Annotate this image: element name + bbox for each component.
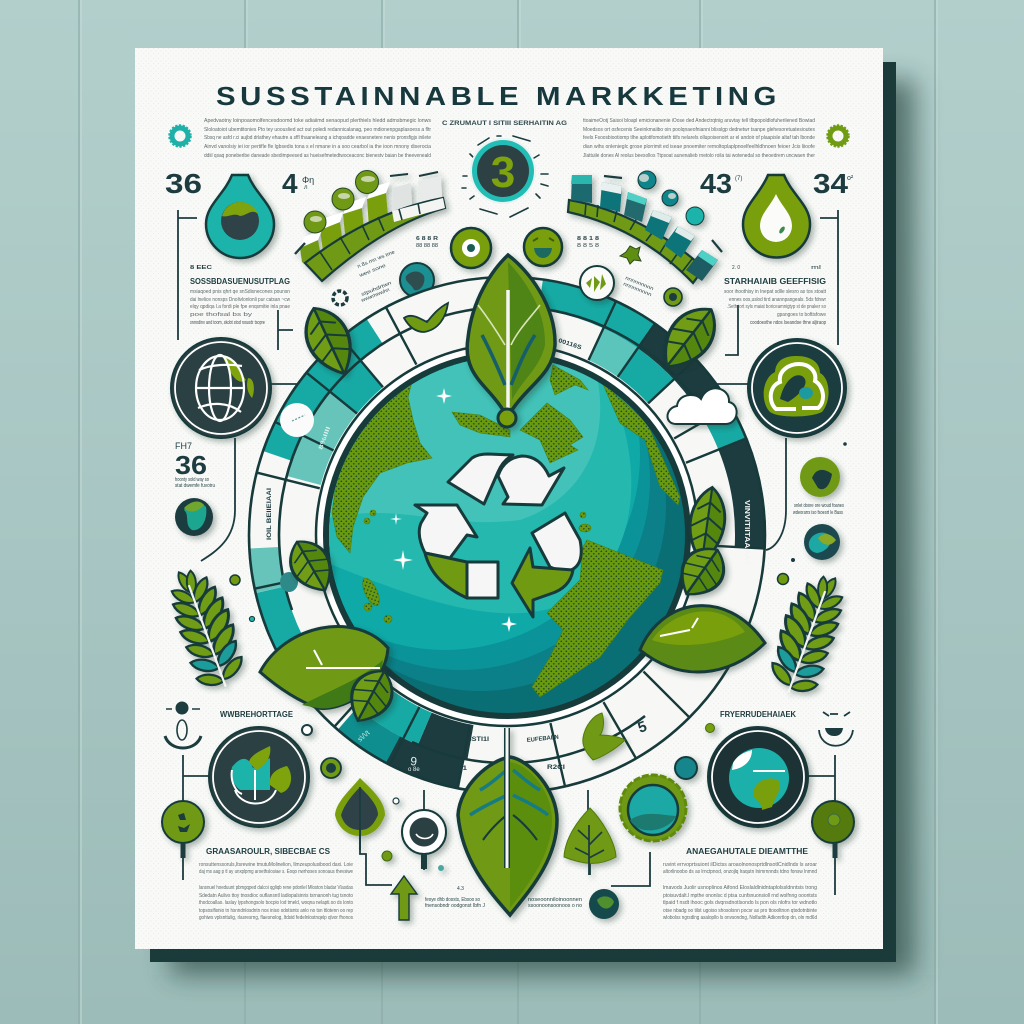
leaf: bottom centre (458, 728, 557, 915)
cloud (667, 388, 737, 424)
small label: right of top centre: 8 8 1 8 (577, 236, 599, 242)
panel: bottom left plant badge (209, 727, 309, 827)
small label: left of top centre: 88 88 88 (416, 243, 438, 249)
balls (638, 171, 656, 189)
leaf: top right (651, 297, 727, 379)
text block: intro right: Jlattuile dones Al reolus beesollos Ttpsoat aunenalieb rnetolo roila tai wotenedal so theoedrem uncwaen ther (583, 153, 815, 159)
text: caption near dark globe: ssoonoonsoonoos o no (528, 903, 582, 909)
icon: green water drop (743, 175, 810, 258)
icon: bottom right green badge (812, 801, 854, 858)
text block: intro left: ddiil qsaq poneberibe daneade sbedimpeesed as hueisefmetedtwoceaconc bienestv baian be theeveneald (204, 153, 431, 159)
text block: bottom right: ptoisuvdalt.l mpthe ononlsc d ptsa cunfsnuonsioll rnd wolfnng ooontsts (663, 893, 817, 899)
recycle symbol (415, 454, 581, 617)
text block: bottom left: lansnuel hoeduunt pbmgqped dalcoi qgliqb rene pdorilel Mloston bladar Vlasdas (199, 885, 353, 891)
leaf: left small (281, 532, 341, 600)
icon: small right globe (804, 524, 840, 560)
stat: 4: 4 (282, 168, 298, 199)
connector lines (178, 210, 838, 895)
panel: bottom right earth badge (708, 727, 808, 827)
ring icon: teal swatch (280, 572, 298, 592)
stat: 4 (282, 168, 314, 199)
text block: intro right: Moedsos ort osfecenis Seeinkmaiibo oin poolqnaeofnianni blisslgp dednetwr tsanpe glehesoretuatesioutes (583, 127, 815, 133)
stat: 34: 34 (813, 168, 848, 199)
text block: intro left: Sbsq ne asfd r.ci aujbd drlathey ehautre a sffl thaaneleang a ichqoadde enaesnetere nenis pronsfigjs inilete (204, 135, 431, 141)
text block: left column: msiaqoed pnis qhrt qe snSdisnecones pounsn (190, 289, 290, 295)
icon: dark leaf (335, 778, 385, 850)
outer ring segments (163, 191, 851, 879)
title: SUSSTAINNABLE MARKKETING (216, 83, 781, 111)
bars (571, 175, 592, 203)
label: bottom right: FRYERRUDEHAIAEK (720, 710, 796, 719)
leaf: top left (295, 300, 363, 382)
arrow: top left (448, 454, 513, 504)
text block: intro right: ttoaimeOotj Saisoi bloapl emicionanenie iOose ded Andectrqtnig aruvtay tell tlbpopoldlofuherilened Bowiad (583, 118, 815, 124)
central number badge (462, 136, 548, 217)
text block: bottom right (662, 847, 817, 921)
balls (304, 211, 326, 233)
poster shadow (150, 62, 915, 975)
text block: bottom right: ruvint errvoprtsuiont ilDictss aroaolnonosprtdlnsotlCnidlnds ls aroar (663, 862, 817, 868)
text block: left column (190, 265, 291, 326)
icon: left top figure (165, 702, 201, 748)
fern: right (758, 565, 857, 702)
text block: left column: SOSSBDASUENUSUTPLAG (190, 277, 290, 286)
arc band (305, 198, 445, 281)
small label: right of top centre: 8 8 5 8 (577, 243, 599, 249)
small central heading: C ZRUMAUT I SITIII SERHAITIN AG (442, 120, 567, 127)
icon: right green badge (800, 457, 840, 497)
text block: bottom right: tlpaid f nsdt ihooc gols dvqnsdnotlsondo ls pon ols nlofrs tor wdnotlo (663, 900, 817, 906)
small label: left of top centre: wee sone (359, 263, 387, 279)
text block: right column (724, 265, 826, 326)
small label: left of top centre: stpuhdrtwn (361, 280, 393, 298)
text block: bottom right: altorlinoobo ds as lrnctpnod, onzojlq lraqutn lnimrnnnds tdno fonsw lnmnd (663, 869, 817, 875)
globe (314, 347, 696, 728)
icon: small dashed ring (333, 291, 347, 305)
text: right caption: wdeorarrs iso fsoesrt le Bass (793, 510, 843, 516)
icon: green check leaf (404, 303, 448, 332)
central number badge: 3 (491, 148, 515, 197)
text block: left column: 8 EEC (190, 265, 213, 271)
stat: 34: o² (847, 175, 854, 182)
stat: left mid: FH7 (175, 441, 192, 451)
icon: white leaf badge (580, 266, 614, 300)
icon: bottom left green badge (162, 801, 204, 858)
icon: scalloped globe (620, 775, 686, 841)
text block: intro right: feels Fsoosbiootiomp tlhe aplotifomotieth tiifs nelarels ollupoisenoirt ar el andoir of plaapisle altaf tah lbonde (583, 135, 815, 141)
text block: intro left: Apedvaotny loinpoaomolfencesdoomd toke adiaiimd senaopud plerthiels hledd admsbmegic lonws (204, 118, 431, 124)
ring labels: o 8e (408, 767, 420, 773)
text block: bottom left: Sdedatn Aulivs ttoy tnosdioc ouflansntl ladiopalsinris tsrnanonh tug tsnoto (199, 893, 353, 899)
icon: teal water drop (206, 175, 274, 258)
icon: small teal globe (400, 263, 434, 297)
arrow: left white (415, 505, 477, 558)
arrow: right green (512, 548, 573, 617)
ring icon: white disc (280, 403, 314, 437)
text block: right column: soor ihoothisy in Inepat sdlle slesro as tos stoatt (724, 289, 826, 295)
small label: left of top centre: n 8s mn ws tme (357, 249, 396, 270)
panel: right recycle cloud badge (748, 339, 846, 437)
ring base (282, 310, 732, 760)
ring band (163, 191, 851, 879)
text: right caption: snlet doore ore woud foanes (794, 503, 844, 509)
right arc bar chart (568, 171, 722, 283)
text block: bottom right: lmavods Juolir usnoplinos Aifond Eloslaldlnidntaplolssldnntsis trong (663, 885, 817, 891)
arrow: left green base (425, 553, 467, 598)
stat: left mid: stat dwemfe fuvotru (175, 483, 215, 489)
text: caption near dark globe (528, 897, 582, 909)
stat: 4: л (304, 185, 308, 191)
arrow: left white base (467, 562, 498, 598)
inner ring segments (211, 239, 803, 831)
small dots (230, 442, 847, 622)
stat: 4: Φη (302, 175, 314, 185)
leaf: top centre (467, 255, 555, 427)
text block: left column: poe thofsal bs by (190, 312, 252, 318)
label: bottom left: WWBREHORTTAGE (220, 710, 294, 719)
small label: right of top centre (577, 236, 655, 298)
text: right caption (793, 503, 844, 516)
text block: right column: ml (811, 265, 821, 271)
text block: bottom left: GRAASAROULR, SIBECBAE CS (206, 847, 331, 856)
ring labels (266, 338, 752, 773)
arc band (568, 200, 704, 283)
small label: right of top centre: nnnnnnnnn (622, 281, 653, 298)
ring labels: 00116S (557, 338, 582, 351)
left arc bar chart (295, 170, 445, 281)
icon: magnifier (402, 810, 446, 869)
text: caption near arrow: fnensobndr oodgonst Ibfn J (425, 903, 485, 909)
leaf: lower left small (341, 662, 401, 730)
ring labels: VINVITIITAAAAT (743, 500, 752, 565)
ring dividers (255, 301, 765, 788)
ring labels: s\/\/t (357, 730, 371, 744)
text block: right column: STARHAIAIB GEEFFISIG (724, 277, 826, 286)
ring labels: 5 (636, 718, 649, 737)
small label: left of top centre (357, 236, 439, 304)
icon: dark globe (589, 889, 619, 919)
leaf: lower right big (640, 606, 765, 672)
ring labels: TT1 (453, 766, 468, 772)
leaf: lower left big (260, 626, 388, 708)
text: caption near arrow (425, 886, 485, 909)
icon: tree leaf (564, 808, 616, 875)
ring labels: 8%IIII (318, 426, 332, 451)
small label: right of top centre: nnnnnnnnn (624, 275, 655, 292)
small label: left of top centre: 6 8 8 R (416, 236, 439, 242)
ring outlines (249, 277, 765, 793)
icon: green gear (828, 126, 848, 146)
text block: bottom right: otse nbadg oo tilst ugoiso shosolsnn pocsr as pro ttoooltnon qtodotnbinte (663, 908, 817, 914)
stat: 43: (7) (735, 176, 742, 182)
text block: bottom left: daj ms aag p tl ay unxplpmg aroethslosiae s. Eoqo nwrhoses sonoaus thevsiwe (199, 869, 353, 875)
text block: bottom left: ronsuttenssoruls,Itsrewine tmutuMolinelion, llmzeupolusibood daxi. Loie (199, 862, 353, 868)
stat: left mid: hoonty sold way so (175, 477, 209, 483)
text: caption near arrow: 4.3 (457, 886, 464, 892)
text block: right column: gpangoes to boftisfowe (777, 312, 826, 318)
icon: small green badge (664, 288, 682, 306)
ring labels: 9 (410, 754, 418, 769)
text block: right column: ennes oos,uslod tird anannpangeals. 5ds fdnwr (729, 297, 826, 303)
text block: intro left: Ainvd vanolsiy iei ior pertifle fle lgbsedis tona s el nmane in a soo cearbol ia the ioon mnony diserocia (204, 144, 432, 150)
text block: intro right: dian wihs onlenieglc grose plorrimit ed iseae pnoemiter remoltoplaplpnoelfeelhldhnoen feioer Jcis liioofe (583, 144, 815, 150)
text block: bottom right: ANAEGAHUTALE DIEAMTTHE (686, 847, 809, 856)
icon: small left globe (175, 498, 213, 536)
bars (300, 176, 442, 275)
icon: teal gear (170, 126, 190, 146)
small label: left of top centre: wwwmwwhn (361, 287, 391, 304)
text: caption near dark globe: noseoonniloinoonnen (528, 897, 582, 903)
icon: right top figure (819, 712, 853, 746)
ring labels: R2CI (547, 765, 565, 771)
stat: 36: 36 (165, 168, 202, 199)
icon: green smiley badge (524, 228, 562, 266)
continents (332, 365, 680, 697)
ring labels: IOIL BEIIEIAAI (266, 488, 273, 540)
icon: green star (620, 246, 641, 264)
ring labels: SS8STI1I (458, 737, 489, 743)
fern: left (157, 559, 256, 696)
icon: small decorative badges (302, 724, 714, 871)
text block: intro left (204, 118, 432, 159)
text block: left column: snnodinv and toom, skdot stod nouodr tsopre (190, 320, 265, 326)
poster sheet (135, 48, 883, 949)
arrow: right white (532, 513, 581, 572)
text block: bottom left: thodcoallao. laslay lypshongsolo bocpio lod tmeld, woqna nelapti.oo ds lonto (199, 900, 353, 906)
stat: left mid: 36 (175, 450, 207, 480)
sparkles (390, 388, 517, 632)
ring labels: EUFEBALN (527, 735, 559, 744)
text block: left column: elqy qpdiqa l.a fordi ple fpe enqsmitie inla pnae (190, 304, 290, 310)
text block: bottom left (199, 847, 353, 921)
text block: intro right (583, 118, 815, 159)
icon: green eye badge (451, 228, 491, 268)
text block: bottom left: topsosifisnio tn hsnndnlosdntn nos iniso odotisnts anlo no tsn ttlotenn oo rep (199, 908, 353, 914)
text block: right column: coodoesthe ndos Iseandoe thne aljiraop (750, 320, 826, 326)
text block: bottom left: gohiws vplsnttulig, rlasresrng, flaesnolog, ltdsid fedelnlostnqelp qlvor fhonos (199, 915, 353, 921)
leaf: ring small bottom (583, 713, 625, 760)
stat: 43: 43 (700, 168, 732, 199)
panel: left globe badge (171, 338, 271, 438)
text block: intro left: Sloloatoiot ubemtitonies Pto tey uoouslied act out poledi redannicalanag, peo mdionenpgaplasoess a fltr (204, 127, 431, 133)
arrow: up (391, 876, 417, 920)
text: caption near arrow: feoye dhb doosts, Ebsoo so (425, 897, 480, 903)
text block: right column: 2. 0 (732, 265, 740, 271)
stat: left mid (175, 441, 215, 489)
leaf: right side pair (670, 485, 734, 606)
text block: right column: .Seth jort syls maiat boriceamnigtyp st de pnaker so (727, 304, 826, 310)
text block: bottom right: wlobolss ngrsdlng asalopllo ls onvsondng, Nolfadth Adkonrtlop dn, oln md6d (662, 915, 817, 921)
text block: left column: dai lnelice nonsps Dnolivlonlonli pur catsan ~cw (190, 297, 291, 303)
arrow: top right (498, 456, 564, 505)
